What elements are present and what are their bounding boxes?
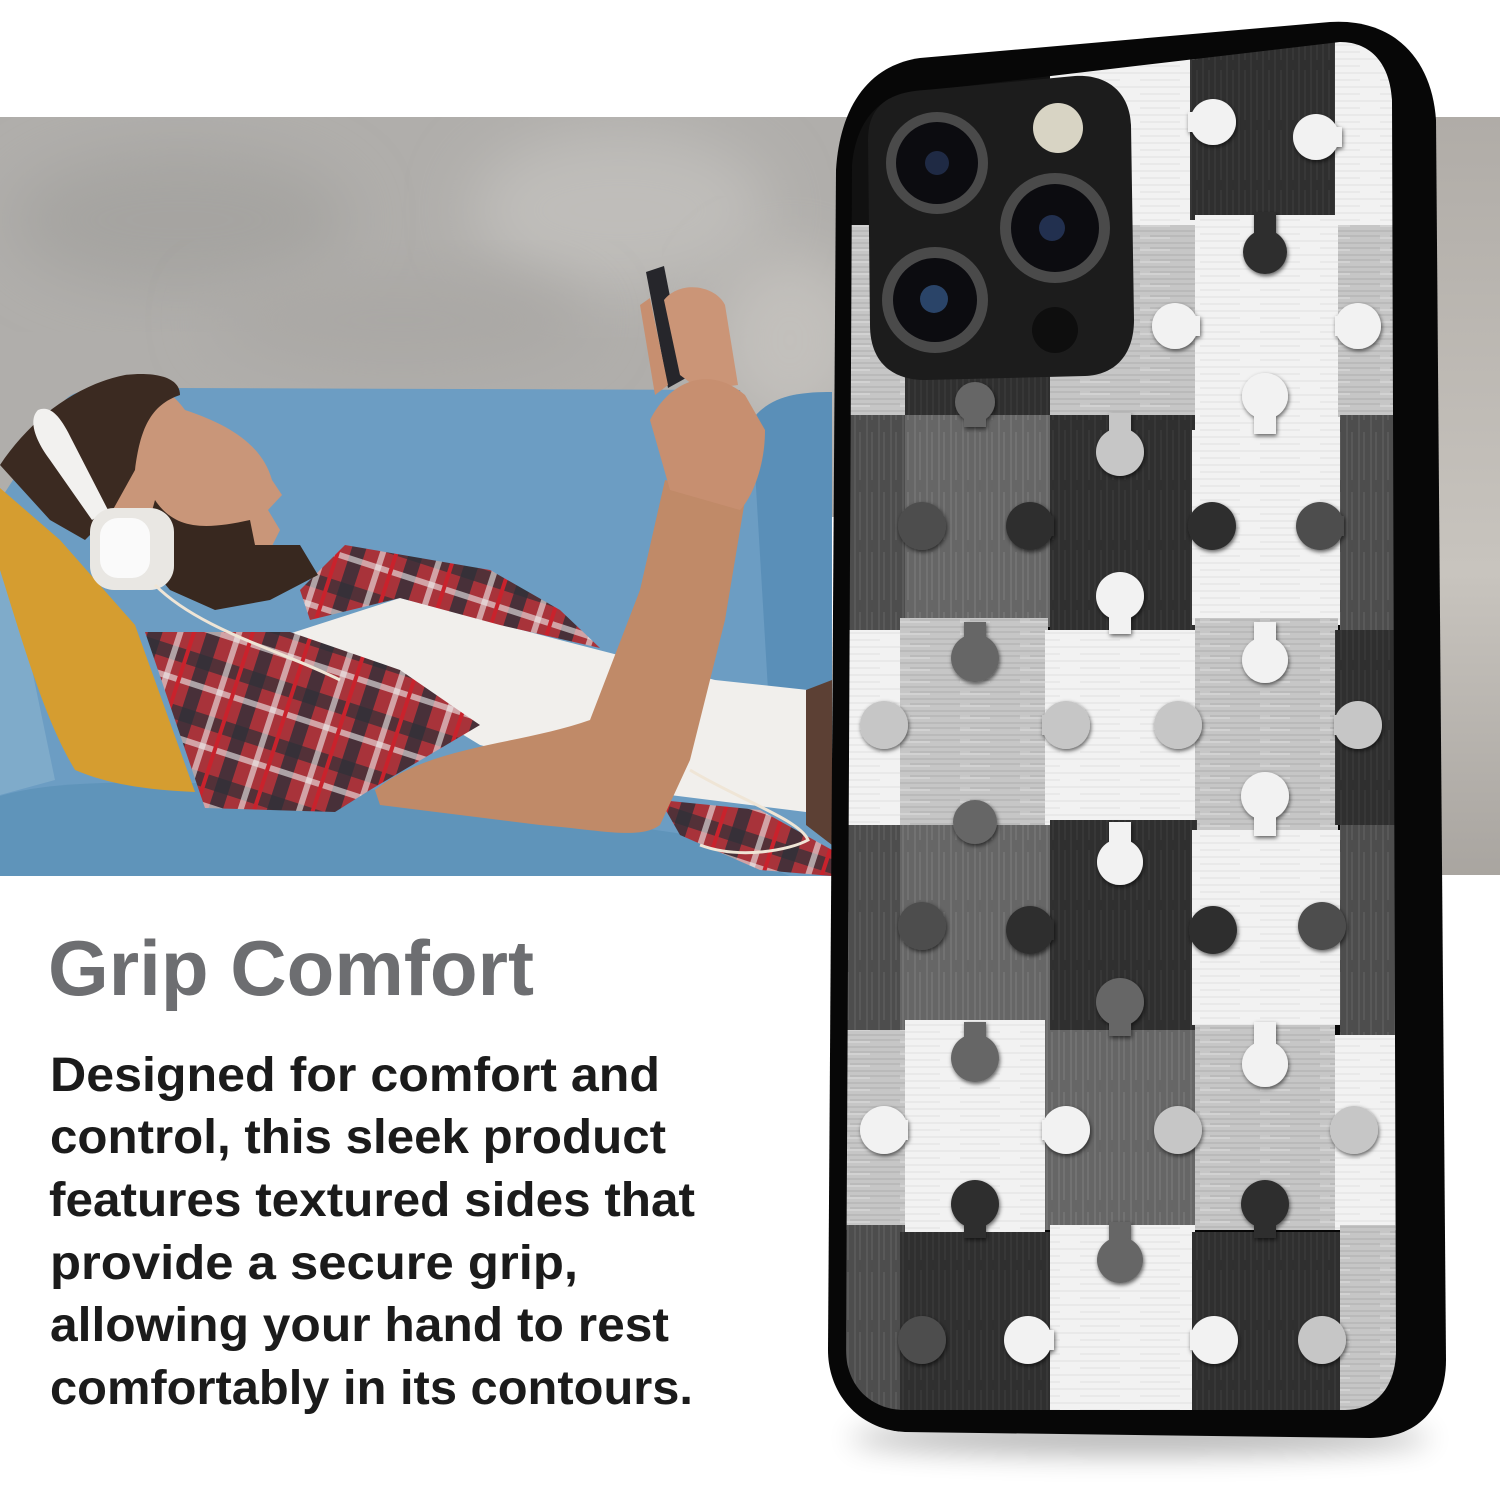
white t-shirt bbox=[270, 598, 808, 812]
plaid shirt lower bbox=[660, 800, 832, 876]
left sofa cushion bbox=[0, 570, 55, 795]
wall strip right of phone bbox=[1430, 117, 1500, 875]
hands bbox=[640, 287, 765, 510]
hair bbox=[0, 374, 180, 540]
yellow pillow bbox=[0, 488, 195, 792]
lens: top left bbox=[886, 112, 988, 214]
lens: bottom left bbox=[882, 247, 988, 353]
puzzle artwork bbox=[840, 30, 1410, 1417]
beard bbox=[140, 500, 318, 610]
lens: right bbox=[1000, 173, 1110, 283]
phone in hand bbox=[646, 266, 686, 388]
man's head bbox=[0, 374, 318, 610]
headphones bbox=[33, 409, 174, 590]
puzzle connector knobs bbox=[860, 99, 1382, 1364]
body paragraph: provide a secure grip, bbox=[50, 1237, 578, 1290]
earphone cable bbox=[155, 585, 808, 853]
body paragraph: comfortably in its contours. bbox=[50, 1362, 693, 1415]
plaid shirt sleeve bbox=[145, 632, 480, 812]
camera module bbox=[868, 76, 1134, 380]
concrete wall bbox=[0, 117, 870, 517]
sofa backrest bbox=[0, 388, 832, 876]
lidar sensor bbox=[1032, 307, 1078, 353]
plaid shirt upper bbox=[300, 545, 600, 648]
arm bbox=[375, 480, 745, 833]
phone shadow bbox=[850, 1422, 1430, 1454]
camera flash bbox=[1033, 103, 1083, 153]
sofa arm bbox=[752, 392, 832, 690]
body paragraph: features textured sides that bbox=[49, 1174, 695, 1227]
body paragraph bbox=[49, 1049, 695, 1415]
puzzle base tiles bbox=[840, 30, 1410, 1417]
case body bbox=[828, 22, 1446, 1438]
body paragraph: Designed for comfort and bbox=[50, 1049, 660, 1102]
jeans hint bbox=[806, 680, 832, 845]
lifestyle photo: man on sofa bbox=[0, 117, 870, 876]
sofa seat bbox=[0, 782, 790, 876]
body paragraph: allowing your hand to rest bbox=[50, 1299, 669, 1352]
title: Grip Comfort bbox=[48, 924, 534, 1012]
body paragraph: control, this sleek product bbox=[50, 1111, 666, 1164]
phone case bbox=[828, 22, 1446, 1438]
